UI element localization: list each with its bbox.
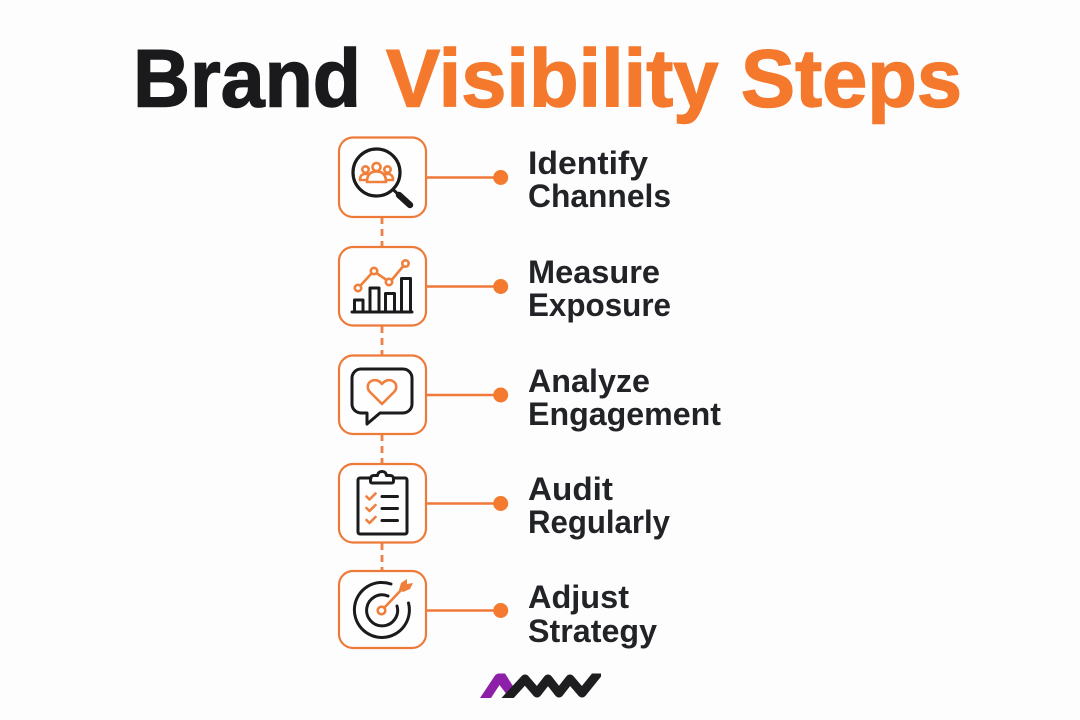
- label: Strategy: [528, 613, 657, 649]
- connector and dot: [426, 603, 508, 618]
- label: Analyze: [528, 363, 650, 399]
- label: Channels: [528, 178, 671, 214]
- icon: magnifier with people: [339, 138, 426, 217]
- label: Measure: [528, 254, 660, 290]
- icon: speech bubble with heart: [339, 356, 426, 434]
- logo: [480, 674, 601, 698]
- label: Engagement: [528, 396, 721, 432]
- dashed connector between steps: [381, 217, 383, 571]
- step 1: identify channels: [339, 138, 671, 217]
- connector and dot: [426, 388, 508, 402]
- label: Identify: [528, 145, 648, 181]
- label: Audit: [528, 471, 613, 507]
- title: [133, 34, 962, 124]
- label: Regularly: [528, 504, 670, 540]
- connector and dot: [426, 170, 508, 185]
- step 4: audit regularly: [339, 464, 670, 542]
- connector and dot: [426, 279, 508, 294]
- label: Exposure: [528, 287, 671, 323]
- icon: target with arrow: [339, 571, 426, 648]
- icon: clipboard checklist: [339, 464, 426, 542]
- title: Brand: [133, 34, 361, 124]
- title: Visibility Steps: [386, 34, 962, 124]
- step 2: measure exposure: [339, 247, 671, 326]
- connector and dot: [426, 496, 508, 511]
- label: Adjust: [528, 579, 629, 615]
- icon: bar chart with trend line: [339, 247, 426, 326]
- step 5: adjust strategy: [339, 571, 657, 649]
- step 3: analyze engagement: [339, 356, 721, 434]
